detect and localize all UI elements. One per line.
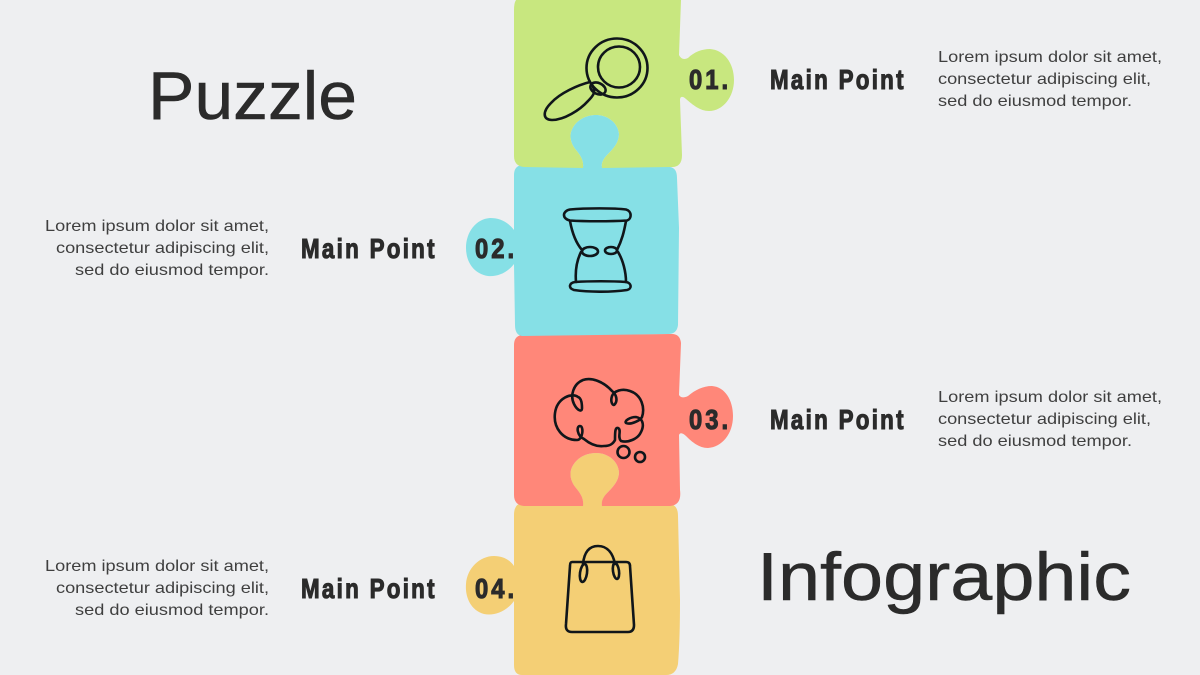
step 03 description xyxy=(938,389,1162,450)
step 01 number: 01. xyxy=(689,63,728,95)
step 01 description: Lorem ipsum dolor sit amet, xyxy=(938,49,1162,66)
step 04 description: consectetur adipiscing elit, xyxy=(56,580,269,597)
step 01 heading: Main Point xyxy=(770,65,904,96)
icon: magnifying glass xyxy=(545,38,648,120)
puzzle piece 4: yellow xyxy=(466,453,680,675)
title: Infographic: Infographic xyxy=(757,539,1131,615)
step 04 description xyxy=(45,558,269,619)
step 03 number: 03. xyxy=(689,403,728,435)
step 01 description xyxy=(938,49,1162,110)
step 03 heading: Main Point xyxy=(770,405,904,436)
step 04 heading: Main Point xyxy=(301,574,435,605)
step 04 description: Lorem ipsum dolor sit amet, xyxy=(45,558,269,575)
step 02 description: consectetur adipiscing elit, xyxy=(56,240,269,257)
title: Puzzle: Puzzle xyxy=(148,58,357,134)
step 04 number: 04. xyxy=(475,572,514,604)
puzzle piece 2: blue xyxy=(466,115,679,336)
step 02 description: sed do eiusmod tempor. xyxy=(75,262,269,279)
step 01 description: consectetur adipiscing elit, xyxy=(938,71,1151,88)
step 04 description: sed do eiusmod tempor. xyxy=(75,602,269,619)
step 02 description: Lorem ipsum dolor sit amet, xyxy=(45,218,269,235)
puzzle piece 1: green xyxy=(514,0,734,168)
icon: shopping bag xyxy=(566,546,634,632)
step 01 description: sed do eiusmod tempor. xyxy=(938,93,1132,110)
step 02 description xyxy=(45,218,269,279)
icon: thought cloud xyxy=(555,379,645,462)
step 03 description: consectetur adipiscing elit, xyxy=(938,411,1151,428)
icon: hourglass xyxy=(564,208,631,292)
step 03 description: sed do eiusmod tempor. xyxy=(938,433,1132,450)
puzzle piece 3: red xyxy=(514,334,733,506)
step 03 description: Lorem ipsum dolor sit amet, xyxy=(938,389,1162,406)
step 02 heading: Main Point xyxy=(301,234,435,265)
step 02 number: 02. xyxy=(475,232,514,264)
